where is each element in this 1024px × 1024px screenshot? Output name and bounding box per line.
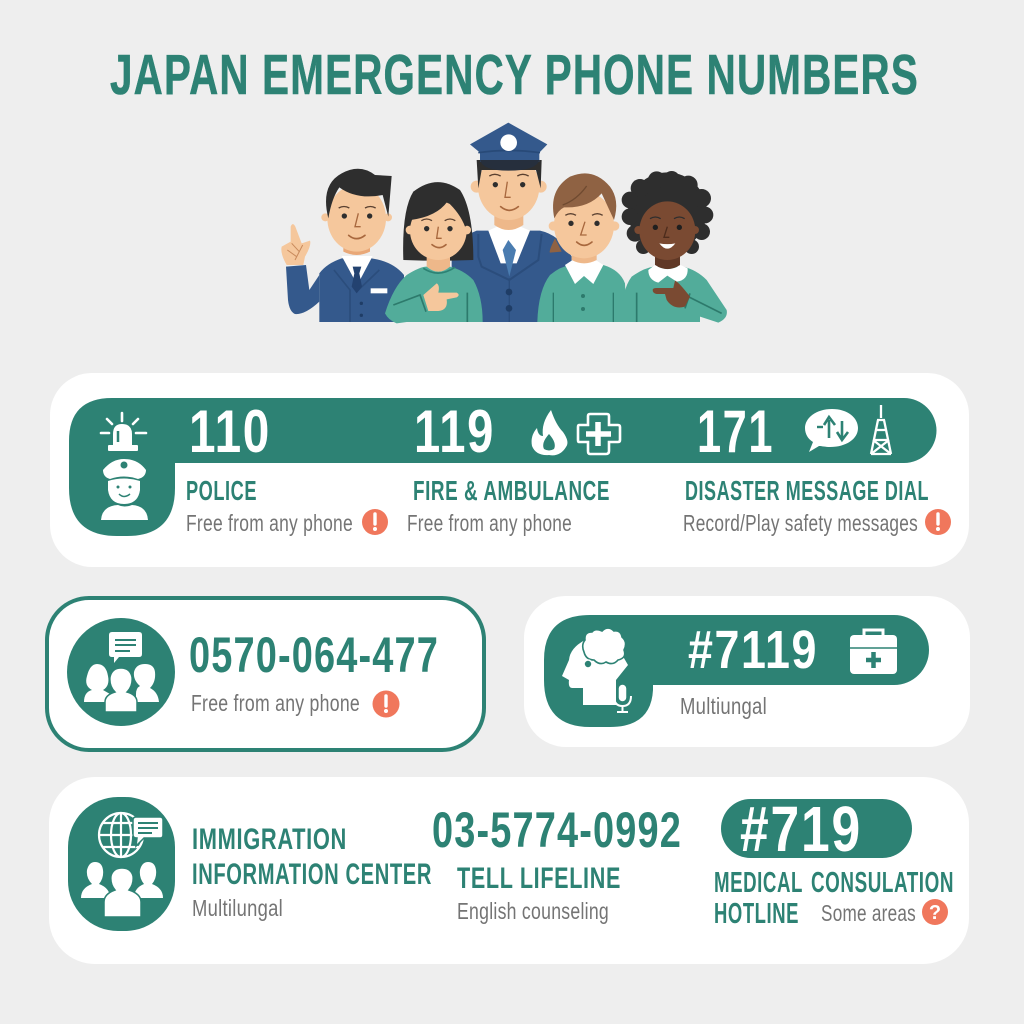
person: officer in the back — [452, 123, 572, 322]
icon: flame — [532, 410, 567, 455]
icon: radio tower — [871, 405, 891, 454]
label: medical consulation hotline: HOTLINE — [714, 898, 799, 930]
label: immigration information center — [192, 823, 432, 891]
label: immigration information center: INFORMATION CENTER — [192, 858, 432, 891]
number 03-5774-0992: 03-5774-0992 — [432, 802, 682, 858]
label: tell lifeline: TELL LIFELINE — [457, 862, 621, 895]
label: fire and ambulance: FIRE & AMBULANCE — [413, 475, 610, 506]
text: note: Multiungal — [680, 693, 767, 719]
label: medical consulation hotline — [714, 867, 954, 930]
icon: medical cross — [578, 414, 620, 454]
text: some areas note: Some areas — [821, 900, 916, 926]
illustration: group of five people — [281, 123, 727, 323]
number 119: 119 — [414, 398, 495, 465]
text: fire note: Free from any phone — [407, 510, 572, 536]
number 110: 110 — [189, 398, 271, 465]
icon: globe with people — [68, 797, 175, 931]
teal header band — [69, 398, 936, 536]
text: note: Free from any phone — [191, 690, 360, 716]
text: multilingual note: Multilungal — [192, 895, 283, 921]
icon: people with speech bubble — [67, 618, 175, 726]
icon: question mark: ? — [929, 902, 941, 924]
person: woman with black hair — [385, 182, 483, 323]
text: counseling note: English counseling — [457, 898, 609, 924]
label: police: POLICE — [186, 475, 257, 506]
pill: #719 number: #719 — [740, 793, 862, 865]
icon: police beacon and officer — [101, 413, 148, 520]
number 171: 171 — [697, 398, 774, 465]
icon: head with thought cloud and microphone — [562, 628, 631, 712]
label: immigration information center: IMMIGRATION — [192, 823, 347, 856]
text: disaster note: Record/Play safety messages — [683, 510, 918, 536]
person: woman with curly hair — [620, 171, 727, 323]
panel: #7119 number — [524, 596, 970, 747]
person: man pointing up — [281, 169, 404, 322]
panel: information and lifeline numbers — [49, 777, 969, 964]
person: woman with brown hair — [537, 173, 627, 322]
panel: 0570 number — [47, 598, 484, 750]
text: police note: Free from any phone — [186, 510, 353, 536]
number 0570-064-477: 0570-064-477 — [189, 627, 439, 683]
icon: message bubble — [805, 409, 858, 452]
panel: primary emergency numbers — [50, 373, 969, 567]
icon: alert — [362, 509, 388, 535]
number #7119: #7119 — [688, 620, 818, 680]
icon: alert — [925, 509, 951, 535]
label: medical consulation hotline: MEDICAL — [714, 867, 803, 899]
teal header band — [544, 615, 929, 727]
icon: first aid case — [850, 630, 897, 674]
icon: question mark — [922, 899, 948, 925]
icon: alert — [372, 690, 400, 718]
